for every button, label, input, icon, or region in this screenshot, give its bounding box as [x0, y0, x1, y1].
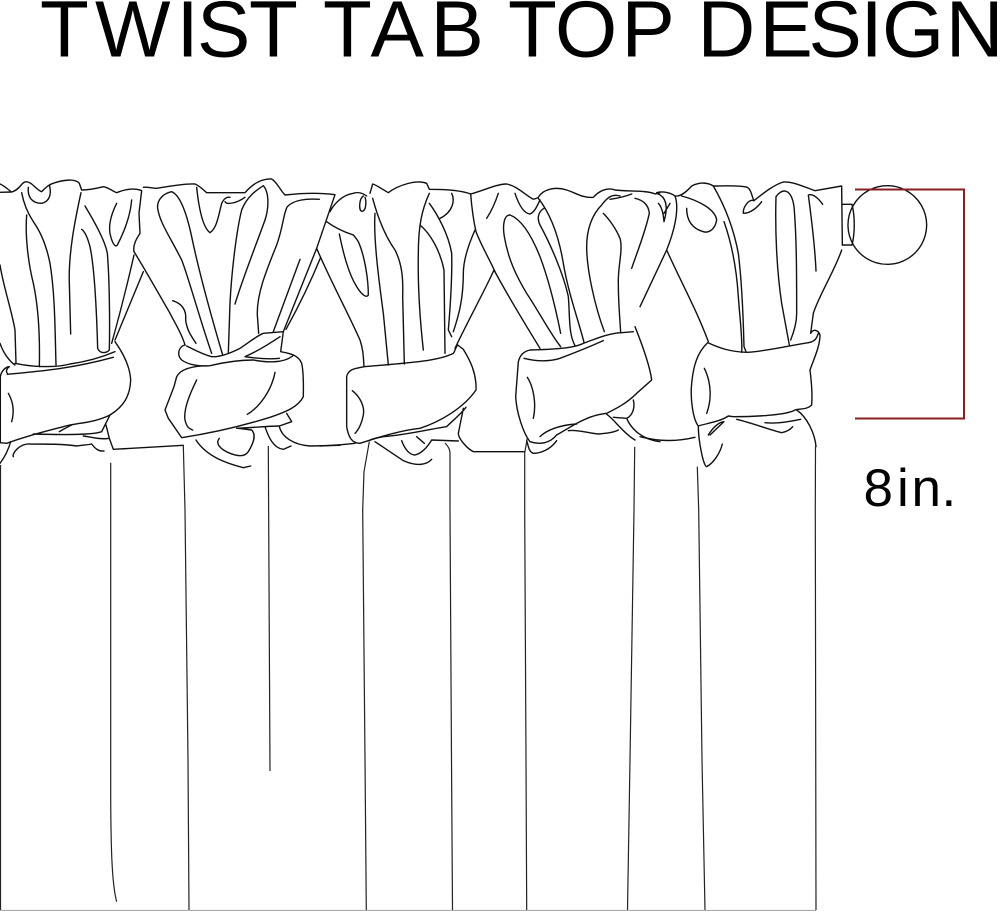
- 8 inch height bracket: [855, 190, 964, 418]
- curtain panel drops: [0, 438, 816, 910]
- tab 4 gathers: [471, 184, 660, 348]
- tab 5 upper: [640, 192, 677, 307]
- tab 6 cuff: [640, 250, 842, 467]
- tab 1 gathers: [0, 180, 143, 367]
- measurement label: 8in.: [864, 459, 956, 518]
- curtain tabs 1 and 2: [0, 179, 340, 468]
- curtain tabs 5 and 6: [640, 182, 927, 467]
- curtain rod finial: [842, 186, 927, 264]
- tab 3 gathers: [317, 182, 495, 367]
- tab 6 gathers: [667, 182, 842, 352]
- tab 3 cuff: [320, 345, 524, 464]
- tab 4 cuff: [516, 327, 660, 453]
- tab 2 gathers: [134, 179, 335, 355]
- curtain tabs 3 and 4: [317, 182, 660, 464]
- tab 1 cuff: [0, 342, 183, 463]
- tab 2 knot: [165, 332, 340, 468]
